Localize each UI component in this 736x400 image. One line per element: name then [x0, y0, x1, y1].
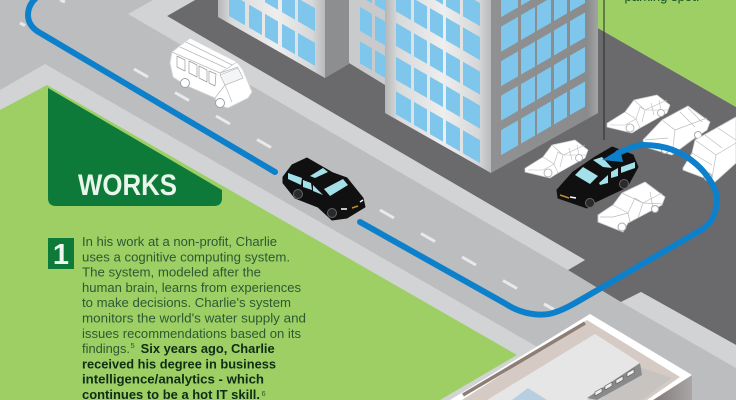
step 1 text block: to make decisions. Charlie's system [82, 296, 291, 310]
parking lot [167, 0, 736, 345]
parked white car E [598, 182, 665, 232]
step 1 text block: In his work at a non-profit, Charlie [82, 235, 277, 249]
step number badge [48, 238, 74, 271]
blue route line [28, 0, 717, 315]
lawn: lower left [0, 85, 517, 400]
front facade windows [396, 0, 480, 163]
parked white SUV C [643, 106, 710, 155]
black car in parking spot [557, 147, 638, 208]
step number: 1 [53, 239, 69, 271]
skylight [512, 388, 547, 400]
step 1 text block: issues recommendations based on its [82, 327, 301, 341]
step 1 text block: findings. [82, 342, 130, 356]
side facade windows [501, 0, 585, 155]
arrow head: parking [602, 149, 623, 162]
parked white van D [683, 117, 736, 182]
step 1 text block: intelligence/analytics - which [82, 373, 264, 387]
sidewalk: lawn edge [0, 64, 560, 400]
step 1 text block: 6 [262, 389, 266, 398]
sidewalk: lower right [621, 292, 736, 368]
step 1 text block: received his degree in business [82, 357, 276, 371]
building: left tower [218, 0, 349, 78]
step 1 text block: The system, modeled after the [82, 266, 261, 280]
rooftop block [487, 334, 640, 400]
lawn: upper right [596, 0, 736, 107]
building: main tower [385, 0, 598, 173]
white van on road [170, 38, 252, 108]
parked white car B [607, 95, 670, 133]
step 1 text block [82, 235, 306, 400]
step 1 text block: Six years ago, Charlie [141, 342, 275, 356]
building: middle tower [349, 0, 387, 85]
step 1 text block: human brain, learns from experiences [82, 281, 301, 295]
step 1 text block: uses a cognitive computing system. [82, 250, 290, 264]
callout pointer line [603, 0, 605, 140]
flat-roof building [450, 314, 692, 400]
black car on road [283, 158, 365, 220]
panel tab: works [48, 88, 222, 206]
heading: works: WORKS [78, 169, 177, 202]
lane markings [20, 0, 554, 310]
step 1 text block: monitors the world's water supply and [82, 312, 306, 326]
sidewalk: along buildings [128, 0, 585, 270]
step 1 text block: 5 [130, 341, 135, 350]
parked white car A [525, 140, 588, 178]
